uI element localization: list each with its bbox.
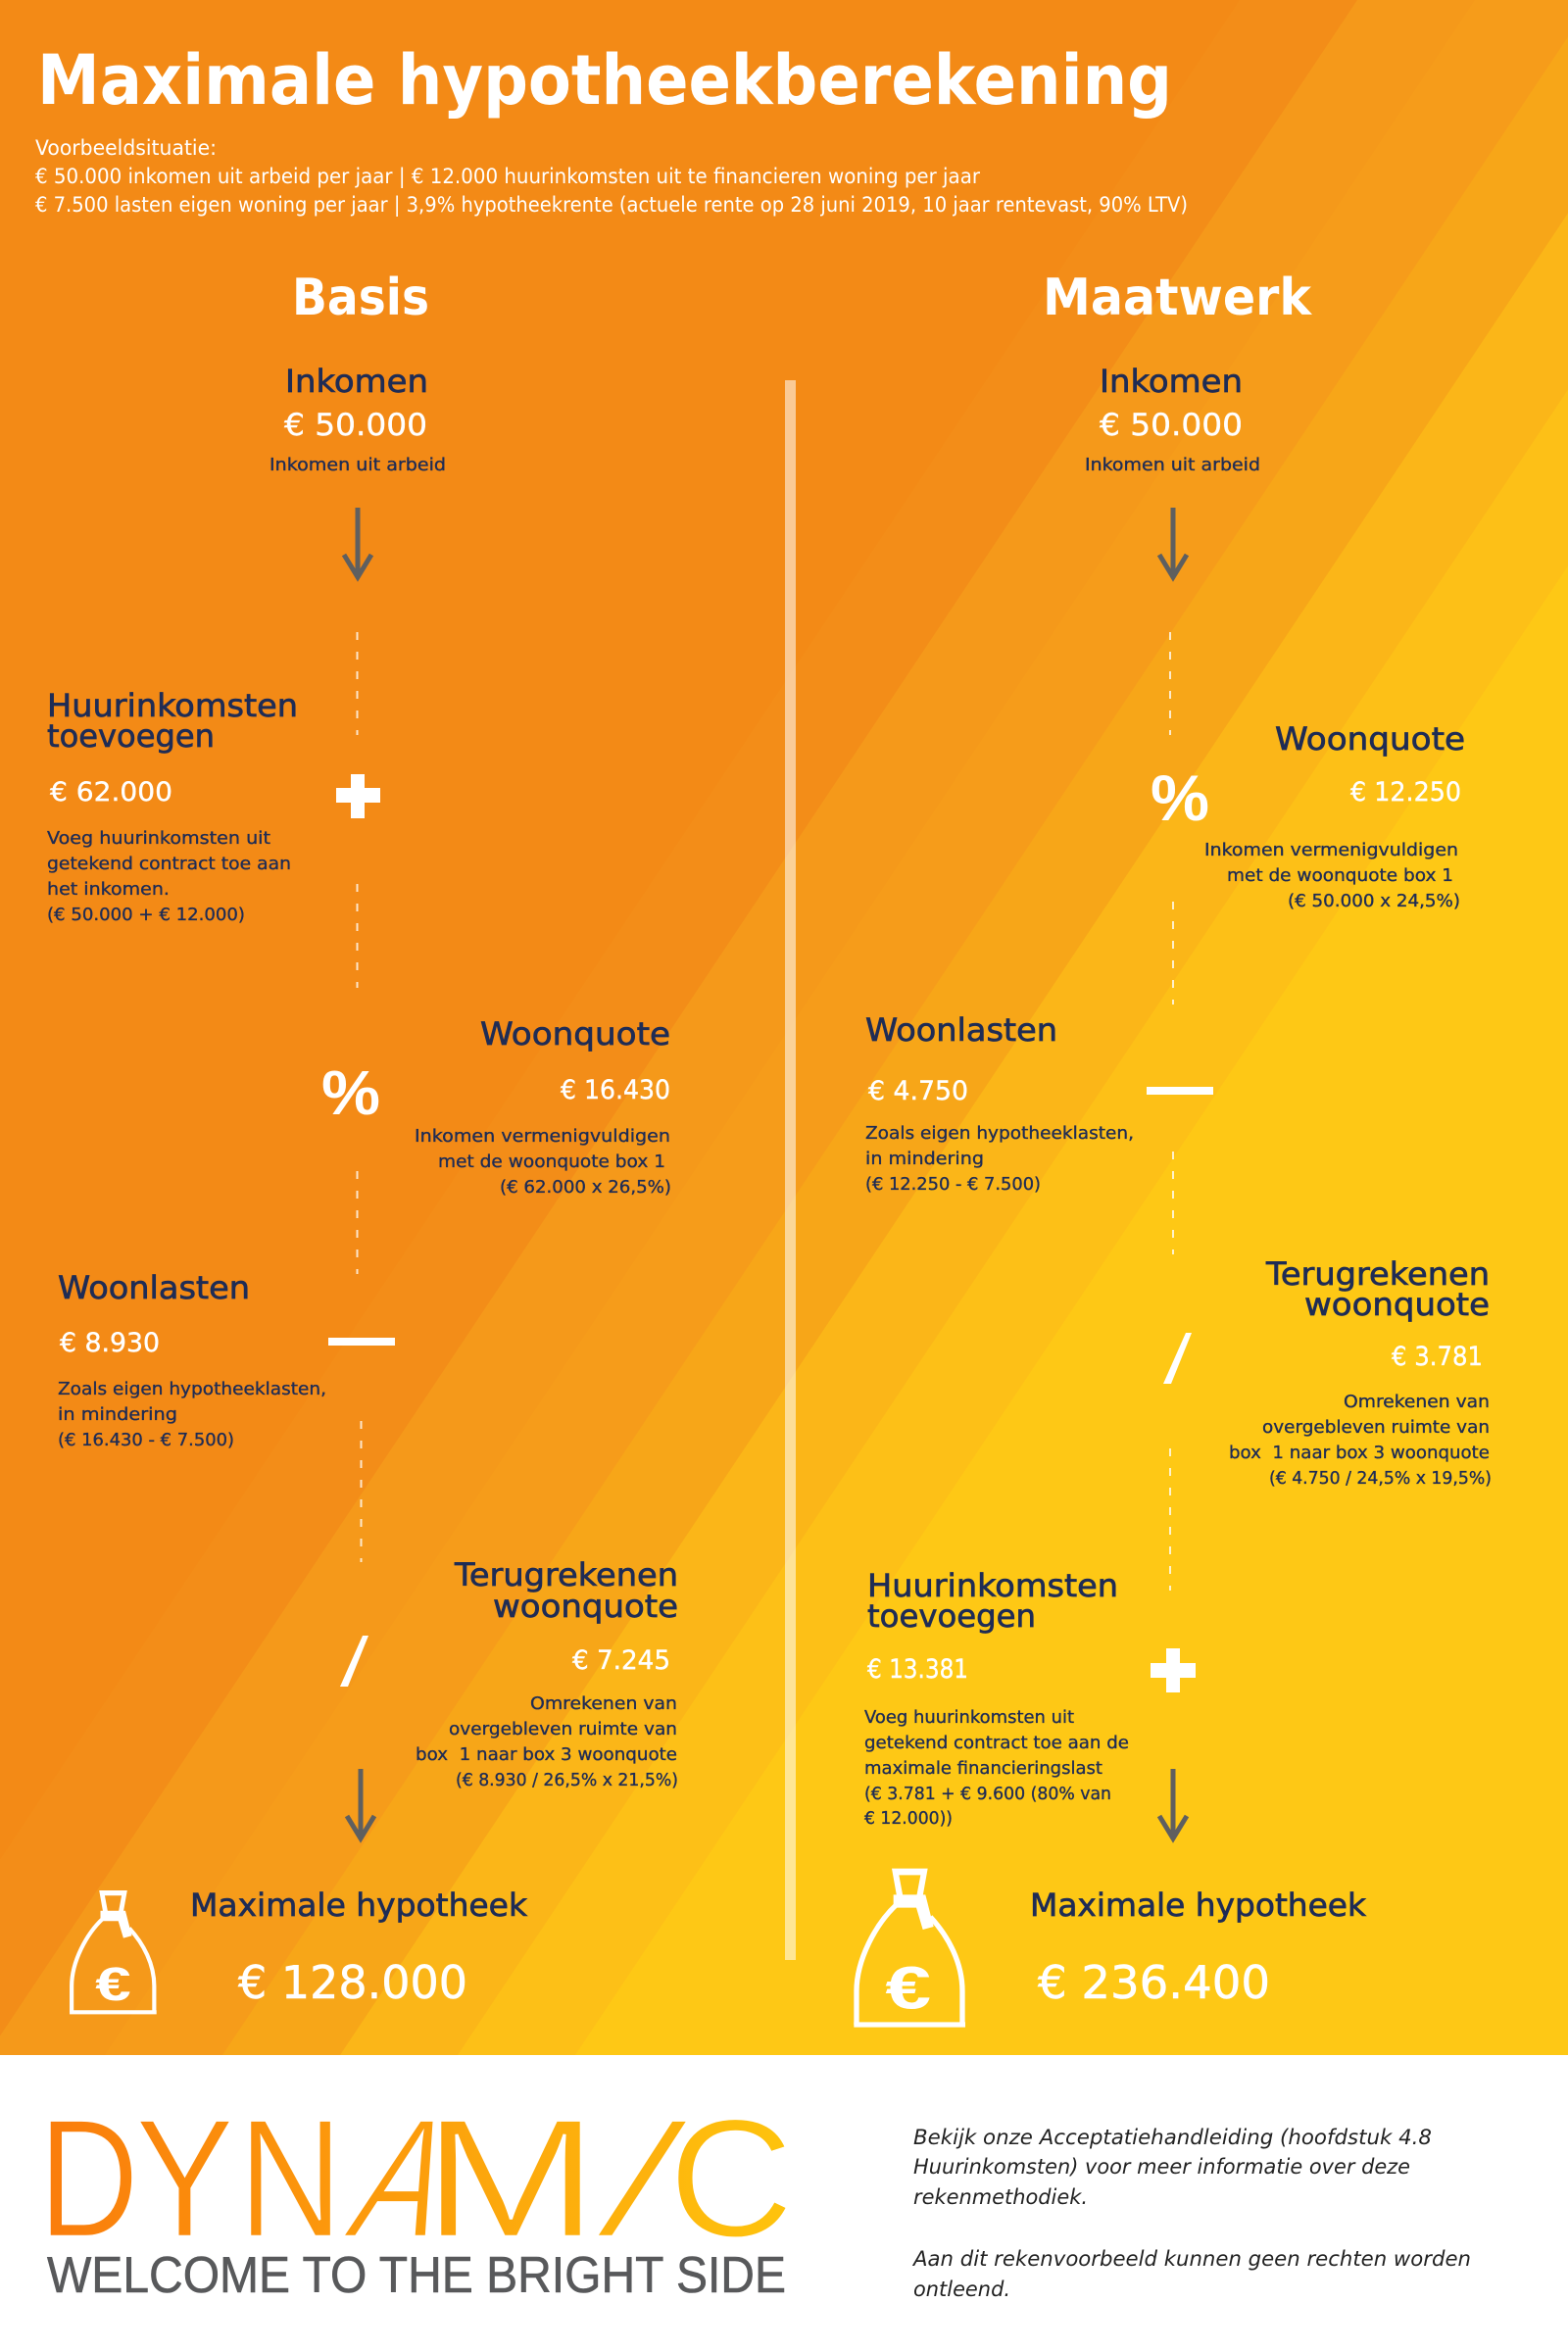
step: huurinkomsten toevoegen: getekend contract toe aan de bbox=[864, 1733, 1129, 1753]
result: maximale hypotheek: Maximale hypotheek bbox=[1030, 1886, 1366, 1924]
step: woonlasten: Woonlasten bbox=[865, 1011, 1057, 1049]
intro text: voorbeeldsituatie bbox=[35, 136, 1188, 218]
step: woonlasten bbox=[865, 1011, 1134, 1195]
step: terugrekenen woonquote: € 7.245 bbox=[572, 1645, 670, 1676]
step: woonquote: Woonquote bbox=[1275, 720, 1465, 758]
icon: plus bbox=[336, 774, 380, 818]
title: Maximale hypotheekberekening bbox=[37, 40, 1172, 121]
step: woonlasten: € 8.930 bbox=[60, 1328, 160, 1358]
step: terugrekenen woonquote bbox=[416, 1556, 678, 1790]
step: woonlasten bbox=[58, 1269, 326, 1450]
result: maximale hypotheek: Maximale hypotheek bbox=[190, 1886, 527, 1924]
step: huurinkomsten toevoegen: € 13.381 bbox=[867, 1654, 968, 1685]
step: inkomen: € 50.000 bbox=[284, 408, 427, 443]
arrow down bbox=[347, 1769, 374, 1838]
logo: dynamic: A bbox=[330, 2083, 482, 2273]
step: terugrekenen woonquote bbox=[1229, 1255, 1492, 1489]
step: huurinkomsten toevoegen: het inkomen. bbox=[47, 879, 170, 900]
step: inkomen: Inkomen bbox=[285, 363, 428, 400]
icon: slash bbox=[1163, 1333, 1192, 1384]
dashed connector bbox=[1169, 1448, 1171, 1591]
footer note bbox=[911, 2126, 1471, 2301]
footer background bbox=[0, 2055, 1568, 2352]
step: terugrekenen woonquote: overgebleven ruimte van bbox=[449, 1719, 677, 1740]
step: woonlasten: Zoals eigen hypotheeklasten, bbox=[865, 1123, 1134, 1144]
arrow down bbox=[1159, 1769, 1187, 1838]
step: inkomen: Inkomen uit arbeid bbox=[270, 455, 446, 475]
step: woonquote: (€ 50.000 x 24,5%) bbox=[1288, 891, 1460, 911]
icon: percent: % bbox=[1151, 761, 1209, 834]
step: huurinkomsten toevoegen: Huurinkomsten bbox=[867, 1567, 1118, 1604]
logo tagline: WELCOME TO THE BRIGHT SIDE bbox=[47, 2247, 786, 2304]
dashed connector bbox=[1172, 1152, 1174, 1254]
step: inkomen: € 50.000 bbox=[1100, 408, 1243, 443]
dashed connector bbox=[357, 1171, 359, 1274]
logo: dynamic: N bbox=[238, 2084, 343, 2273]
step: huurinkomsten toevoegen: maximale financieringslast bbox=[864, 1758, 1102, 1779]
step: woonquote: met de woonquote box 1 bbox=[1227, 865, 1453, 886]
logo: dynamic: I bbox=[558, 2085, 726, 2273]
step: terugrekenen woonquote: Terugrekenen bbox=[454, 1556, 678, 1593]
result: maximale hypotheek: € 236.400 bbox=[1038, 1956, 1270, 2009]
step: huurinkomsten toevoegen: € 12.000)) bbox=[864, 1808, 953, 1829]
step: terugrekenen woonquote: Omrekenen van bbox=[530, 1693, 677, 1714]
icon: slash bbox=[340, 1636, 368, 1687]
step: huurinkomsten toevoegen: Voeg huurinkomsten uit bbox=[47, 828, 270, 849]
step: woonquote bbox=[415, 1015, 671, 1198]
step: woonquote: met de woonquote box 1 bbox=[438, 1152, 665, 1172]
dashed connector bbox=[357, 632, 359, 735]
step: terugrekenen woonquote: box 1 naar box 3 woonquote bbox=[1229, 1443, 1490, 1463]
step: woonlasten: (€ 16.430 - € 7.500) bbox=[58, 1430, 234, 1450]
step: woonlasten: Woonlasten bbox=[58, 1269, 250, 1306]
step: woonlasten: in mindering bbox=[58, 1404, 177, 1425]
arrow down bbox=[344, 508, 371, 577]
heading: Basis: Basis bbox=[292, 269, 429, 327]
step: woonquote: (€ 62.000 x 26,5%) bbox=[500, 1177, 671, 1198]
step: terugrekenen woonquote: (€ 8.930 / 26,5% x 21,5%) bbox=[456, 1770, 678, 1790]
icon: minus bbox=[328, 1338, 395, 1346]
step: woonlasten: Zoals eigen hypotheeklasten, bbox=[58, 1379, 326, 1399]
footer note: Bekijk onze Acceptatiehandleiding (hoofdstuk 4.8 bbox=[913, 2126, 1432, 2149]
icon: minus bbox=[1147, 1087, 1213, 1095]
result: maximale hypotheek: € 128.000 bbox=[238, 1956, 467, 2009]
icon: plus bbox=[1151, 1648, 1196, 1692]
step: woonlasten: in mindering bbox=[865, 1149, 984, 1169]
logo: dynamic bbox=[38, 2083, 794, 2273]
logo: dynamic: C bbox=[668, 2084, 794, 2273]
dashed connector bbox=[1169, 632, 1171, 735]
heading: Maatwerk: Maatwerk bbox=[1043, 269, 1312, 327]
icon: money bag: € bbox=[95, 1958, 131, 2011]
icon: money bag bbox=[70, 1890, 157, 2014]
step: terugrekenen woonquote: woonquote bbox=[1304, 1286, 1490, 1323]
logo: dynamic: Y bbox=[135, 2084, 234, 2273]
step: inkomen: Inkomen uit arbeid bbox=[1085, 455, 1260, 475]
step: inkomen bbox=[1085, 363, 1260, 475]
step: huurinkomsten toevoegen: Voeg huurinkomsten uit bbox=[864, 1707, 1074, 1728]
step: terugrekenen woonquote: box 1 naar box 3 woonquote bbox=[416, 1744, 677, 1765]
footer note: ontleend. bbox=[913, 2278, 1010, 2301]
step: inkomen bbox=[270, 363, 446, 475]
step: terugrekenen woonquote: (€ 4.750 / 24,5% x 19,5%) bbox=[1269, 1468, 1492, 1489]
icon: money bag bbox=[854, 1869, 965, 2028]
dashed connector bbox=[1172, 902, 1174, 1004]
result: maximale hypotheek bbox=[190, 1886, 527, 2009]
step: huurinkomsten toevoegen: (€ 50.000 + € 12.000) bbox=[47, 905, 245, 925]
icon: money bag: € bbox=[885, 1954, 931, 2022]
footer note: Aan dit rekenvoorbeeld kunnen geen rechten worden bbox=[911, 2247, 1471, 2271]
dashed connector bbox=[357, 884, 359, 988]
intro text: voorbeeldsituatie: € 7.500 lasten eigen woning per jaar | 3,9% hypotheekrente (actuele rente op 28 juni 2019, 10 jaar rentevast, 90% LTV) bbox=[35, 193, 1188, 218]
footer note: rekenmethodiek. bbox=[913, 2185, 1088, 2209]
step: woonquote: € 12.250 bbox=[1350, 777, 1461, 808]
footer note: Huurinkomsten) voor meer informatie over deze bbox=[913, 2155, 1410, 2179]
step: huurinkomsten toevoegen: Huurinkomsten bbox=[47, 687, 298, 724]
intro text: voorbeeldsituatie: Voorbeeldsituatie: bbox=[35, 136, 217, 160]
step: huurinkomsten toevoegen bbox=[864, 1567, 1129, 1829]
step: woonquote: Inkomen vermenigvuldigen bbox=[415, 1126, 670, 1147]
step: huurinkomsten toevoegen: toevoegen bbox=[867, 1597, 1036, 1635]
step: terugrekenen woonquote: woonquote bbox=[493, 1588, 678, 1625]
step: woonlasten: € 4.750 bbox=[868, 1076, 968, 1106]
panel: maatwerk bbox=[854, 269, 1492, 2028]
step: inkomen: Inkomen bbox=[1100, 363, 1243, 400]
logo: dynamic: D bbox=[38, 2084, 139, 2273]
panel: basis bbox=[47, 269, 678, 2014]
step: terugrekenen woonquote: overgebleven ruimte van bbox=[1262, 1417, 1490, 1438]
step: huurinkomsten toevoegen: toevoegen bbox=[47, 717, 215, 755]
dashed connector bbox=[361, 1421, 363, 1562]
step: huurinkomsten toevoegen: getekend contract toe aan bbox=[47, 854, 291, 874]
step: woonquote bbox=[1204, 720, 1465, 911]
step: huurinkomsten toevoegen bbox=[47, 687, 298, 925]
step: huurinkomsten toevoegen: (€ 3.781 + € 9.600 (80% van bbox=[864, 1784, 1111, 1804]
result: maximale hypotheek bbox=[1030, 1886, 1366, 2009]
step: terugrekenen woonquote: Terugrekenen bbox=[1265, 1255, 1490, 1293]
logo: dynamic: M bbox=[422, 2084, 599, 2273]
step: terugrekenen woonquote: € 3.781 bbox=[1392, 1342, 1483, 1372]
step: woonlasten: (€ 12.250 - € 7.500) bbox=[865, 1174, 1041, 1195]
icon: percent: % bbox=[321, 1057, 380, 1128]
step: woonquote: Inkomen vermenigvuldigen bbox=[1204, 840, 1458, 860]
step: woonquote: € 16.430 bbox=[561, 1075, 670, 1105]
step: terugrekenen woonquote: Omrekenen van bbox=[1344, 1392, 1490, 1412]
step: woonquote: Woonquote bbox=[480, 1015, 670, 1053]
arrow down bbox=[1159, 508, 1187, 577]
step: huurinkomsten toevoegen: € 62.000 bbox=[50, 777, 172, 808]
center divider bbox=[785, 380, 796, 1960]
intro text: voorbeeldsituatie: € 50.000 inkomen uit arbeid per jaar | € 12.000 huurinkomsten uit te financieren woning per jaar bbox=[35, 165, 980, 189]
